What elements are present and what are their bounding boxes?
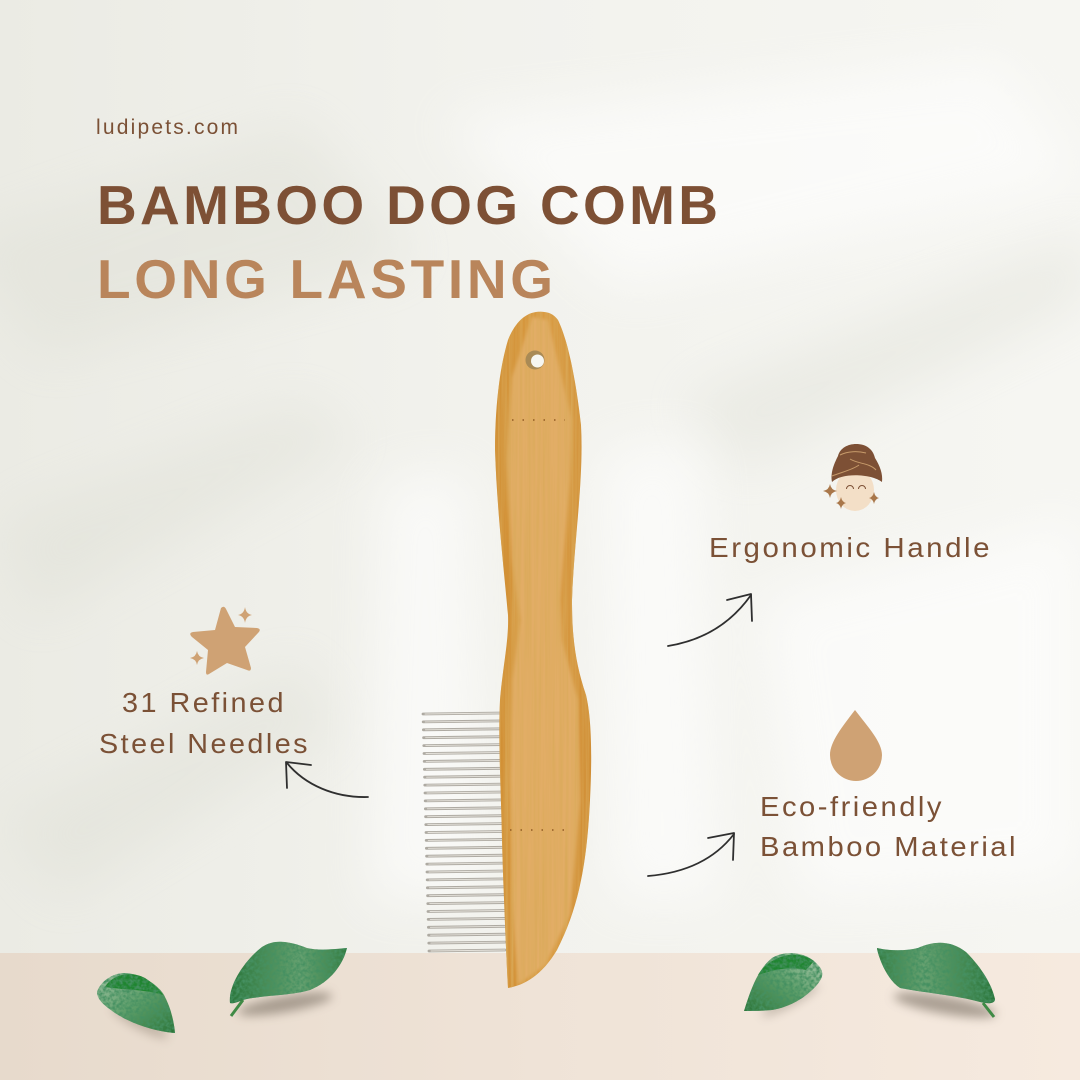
title (97, 174, 718, 310)
title line 2: LONG LASTING (97, 248, 553, 310)
leaf right (744, 953, 822, 1020)
label: eco-friendly bamboo material (760, 791, 1018, 862)
site label: ludipets.com (96, 116, 238, 139)
label: 31 refined steel needles (99, 687, 310, 759)
label: ergonomic handle: Ergonomic Handle (709, 532, 992, 563)
arrow to material (648, 833, 734, 876)
leaf far left (97, 973, 175, 1042)
floor (0, 953, 1080, 1080)
label: 31 refined steel needles: Steel Needles (99, 728, 310, 759)
leaf left (230, 942, 347, 1022)
comb handle (495, 312, 592, 988)
comb needles (423, 713, 505, 951)
label: eco-friendly bamboo material: Eco-friendly (760, 791, 944, 822)
icon: star (190, 607, 260, 675)
arrow to needles (286, 762, 368, 797)
comb hole (526, 350, 544, 370)
label: 31 refined steel needles: 31 Refined (122, 687, 286, 718)
label: eco-friendly bamboo material: Bamboo Material (760, 831, 1018, 862)
icon: face (823, 444, 882, 511)
leaf far right (872, 938, 1000, 1023)
arrow to handle (668, 594, 752, 646)
title line 1: BAMBOO DOG COMB (97, 174, 718, 236)
icon: drop (830, 710, 882, 781)
